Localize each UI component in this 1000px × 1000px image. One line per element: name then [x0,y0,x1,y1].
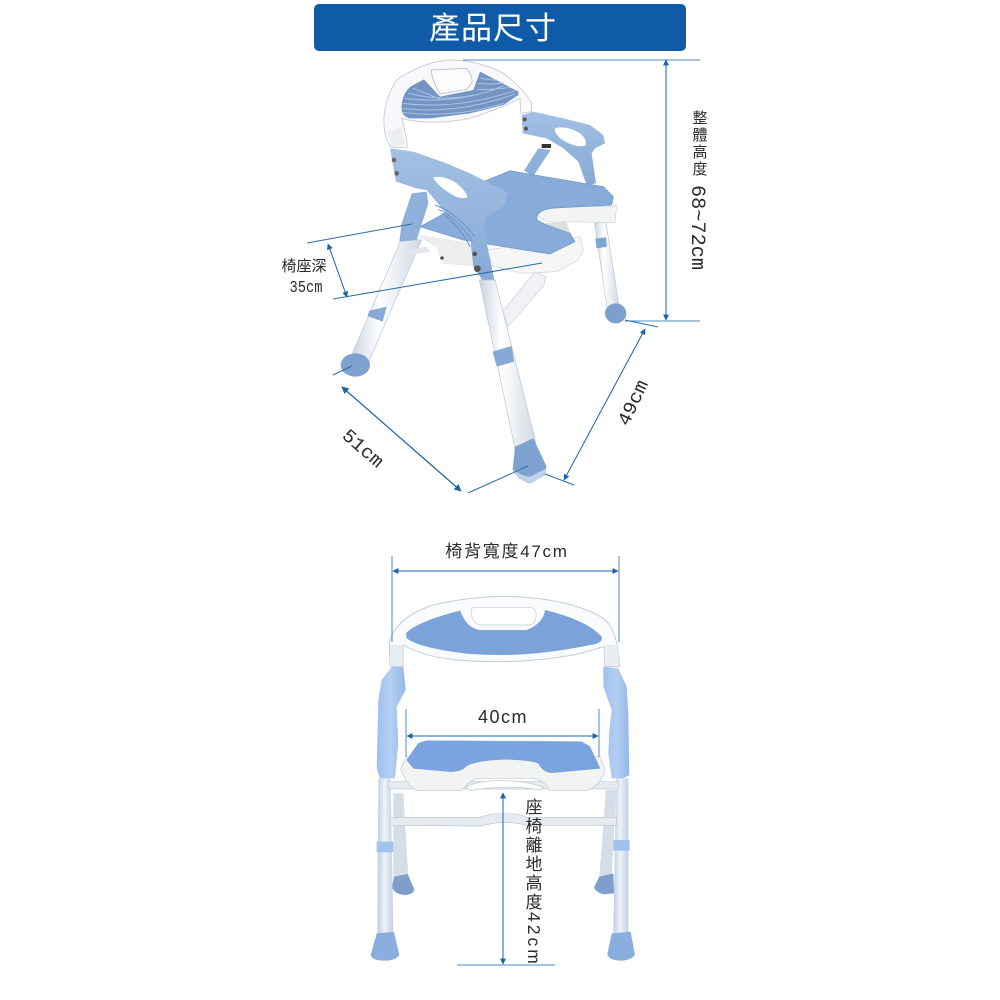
label: 51cm: 51cm [337,425,388,473]
near armrest [390,148,508,283]
right armrest [603,667,629,778]
label: seat height [524,798,544,967]
backrest [389,596,619,667]
label: 40cm: 40cm [478,707,528,727]
toilet opening ring [466,781,543,791]
cross bars [388,782,618,826]
dimension: seat depth [307,224,542,299]
left armrest [377,667,406,778]
label: seat depth [281,258,327,298]
title banner [314,4,686,51]
front leg [479,280,547,483]
seat white tray [401,757,605,791]
label: seat height: 地 [526,855,542,874]
label: seat height: 度 [526,893,542,912]
label: 49cm: 49cm [613,377,654,430]
seat blue pad [407,741,600,773]
far right leg [594,218,626,323]
label: seat height: 椅 [526,817,542,836]
folding brace [503,272,546,327]
backrest [384,60,532,147]
label: back width: 椅背寬度47cm [445,542,569,561]
label: overall height: 度 [692,161,708,178]
far armrest [522,112,605,185]
label: seat height: 離 [526,836,542,855]
label: seat depth: 椅座深 [281,258,327,275]
label: overall height: 高 [692,144,708,161]
seat blue pad [420,171,613,254]
label: overall height: 體 [692,127,708,144]
front view chair photo [371,596,635,961]
front legs [371,778,635,961]
title banner: 產品尺寸 [429,11,557,46]
dimension: overall height [463,60,700,321]
label: overall height: 68~72cm [685,185,708,270]
dimension: back width 47cm [392,556,619,642]
dimension: seat width 40cm [406,709,599,757]
dimension: width 51cm [333,366,528,493]
label: seat height: 42cm [524,912,544,967]
seat white tray [408,205,617,273]
label: seat depth: 35cm [290,279,322,298]
perspective view chair photo [341,60,626,483]
rear legs [392,790,616,895]
dimension: seat height 42cm [457,793,555,965]
label: seat height: 高 [526,874,542,893]
rear left leg [341,238,422,377]
label: overall height [685,110,708,270]
leg pivot arm [399,192,428,242]
dimension: depth 49cm [545,320,658,485]
label: overall height: 整 [692,110,708,127]
label: seat height: 座 [526,798,542,817]
